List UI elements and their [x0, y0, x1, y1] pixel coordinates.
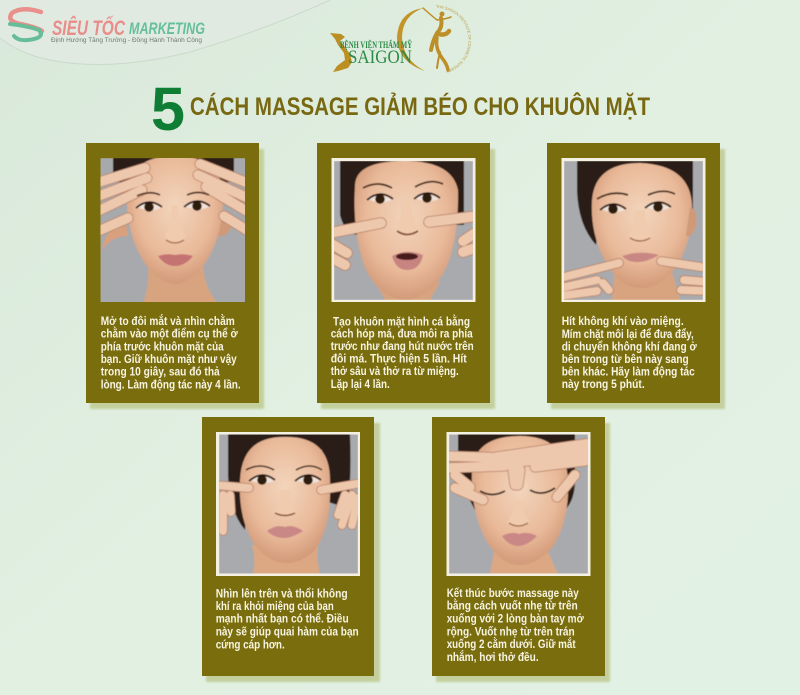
icon: dancer figure: [423, 8, 451, 70]
brand name: SIÊU TỐC: [52, 16, 126, 40]
instruction text: bạn. Giữ khuôn mặt như vậy: [101, 354, 237, 366]
instruction text: trước như đang hút nước trên: [331, 341, 474, 353]
instruction text: Tạo khuôn mặt hình cá bằng: [333, 316, 470, 328]
instruction text: xuống với 2 lòng bàn tay mở: [447, 613, 584, 625]
logo: Siêu Tốc Marketing: MARKETING: [129, 19, 205, 38]
instruction text: di chuyển không khí đang ở: [562, 341, 697, 353]
instruction text: [101, 315, 241, 391]
card background: [432, 417, 610, 682]
icon: gold crescent: [397, 8, 425, 71]
instruction text: trong 10 giây, sau đó thả: [101, 367, 220, 379]
instruction text: [216, 588, 359, 652]
title text: CÁCH MASSAGE GIẢM BÉO CHO KHUÔN MẶT: [190, 91, 650, 121]
instruction text: này sẽ giúp quai hàm của bạn: [216, 626, 359, 638]
card background: [547, 143, 725, 409]
card background: [86, 143, 264, 409]
instruction text: nhắm, hơi thở đều.: [447, 651, 539, 664]
card background: [202, 417, 380, 682]
logo: Bệnh viện Thẩm Mỹ Saigon: THE SAIGON INSTITUTE OF COSMETIC SURGERY: [436, 5, 472, 74]
instruction text: Hít không khí vào miệng.: [562, 316, 684, 328]
instruction text: Nhìn lên trên và thổi không: [216, 588, 348, 600]
instruction text: Lặp lại 4 lần.: [331, 379, 390, 391]
photo: hands across forehead, eyes closed: [444, 434, 592, 574]
instruction text: thở sâu và thở ra từ miệng.: [331, 366, 459, 378]
instruction text: khí ra khỏi miệng của bạn: [216, 601, 334, 613]
instruction text: Kết thúc bước massage này: [447, 588, 579, 600]
card background: [317, 143, 495, 409]
photo: looking up with fingers under eyes: [214, 434, 362, 574]
hospital name: BỆNH VIỆN THẨM MỸ: [340, 40, 412, 50]
instruction text: bên khác. Hãy làm động tác: [562, 366, 695, 378]
logo: Bệnh viện Thẩm Mỹ Saigon: SAIGON: [348, 47, 412, 68]
panel: step 4: [202, 417, 380, 682]
instruction text: phía trước khuôn mặt của: [101, 341, 224, 353]
header swoosh: [0, 0, 330, 64]
instruction text: lòng. Làm động tác này 4 lần.: [101, 379, 241, 391]
instruction text: bằng cách vuốt nhẹ từ trên: [447, 600, 578, 613]
circular caption: [436, 8, 468, 72]
instruction text: Mở to đôi mắt và nhìn chằm: [101, 315, 235, 328]
instruction text: mạnh nhất bạn có thể. Điều: [216, 614, 349, 626]
photo: fish face with fingers on cheeks: [330, 161, 478, 300]
instruction text: đôi má. Thực hiện 5 lần. Hít: [331, 354, 467, 366]
instruction text: này trong 5 phút.: [562, 379, 645, 391]
panel: step 3: [547, 143, 725, 409]
instruction text: xuống 2 cằm dưới. Giữ mắt: [447, 638, 576, 651]
instruction text: Mím chặt môi lại để đưa đẩy,: [562, 329, 694, 341]
instruction text: [447, 588, 584, 664]
logo: Bệnh viện Thẩm Mỹ Saigon: [330, 5, 472, 74]
instruction text: [331, 316, 474, 391]
instruction text: cứng cáp hơn.: [216, 640, 285, 652]
instruction text: rộng. Vuốt nhẹ từ trên trán: [447, 626, 575, 638]
panel: step 5: [432, 417, 610, 682]
big number 5: 5: [151, 75, 185, 143]
instruction text: chằm vào một điểm cụ thể ở: [101, 328, 238, 341]
tagline: Định Hướng Tăng Trưởng - Đồng Hành Thành Công: [51, 35, 202, 44]
instruction text: bên trong từ bên này sang: [562, 354, 689, 366]
icon: Vietnam map: [330, 33, 352, 72]
instruction text: cách hóp má, đưa môi ra phía: [331, 329, 473, 341]
title: [151, 75, 650, 143]
photo: hands on forehead: [96, 156, 250, 303]
logo: Siêu Tốc Marketing: [10, 9, 205, 44]
panel: step 1: [86, 143, 264, 409]
icon: S mark: [10, 9, 42, 40]
instruction text: [562, 316, 697, 391]
panel: step 2: [317, 143, 495, 409]
photo: fingers at mouth corners: [560, 161, 708, 300]
